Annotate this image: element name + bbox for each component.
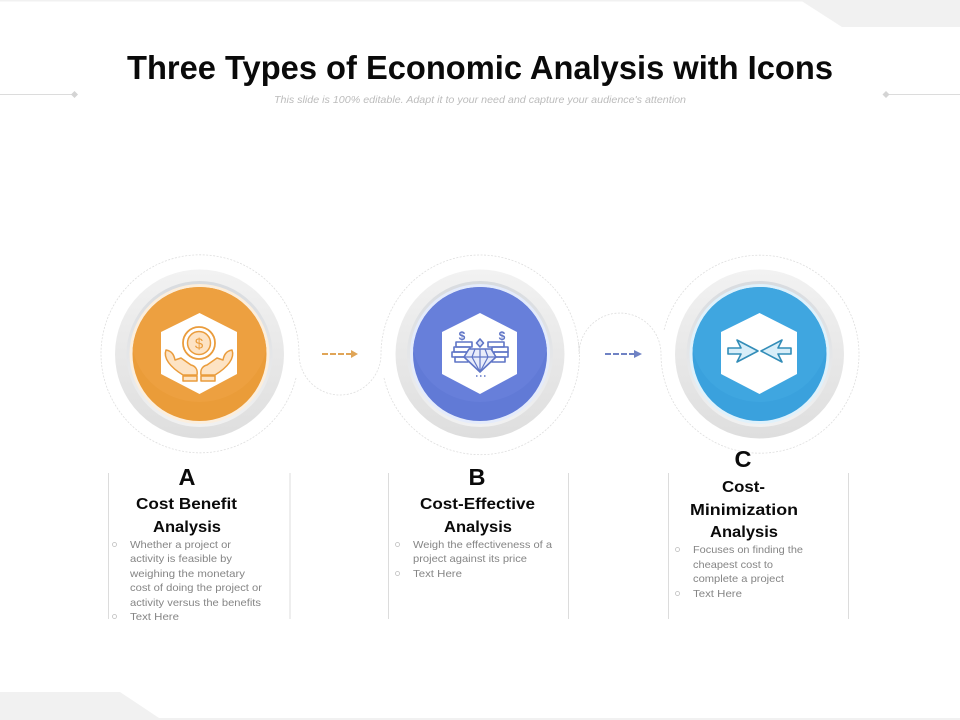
bullet list B: Weigh the effectiveness of a — [413, 540, 552, 551]
hexagon A — [161, 313, 237, 394]
icon: diamond with coins: $ — [459, 329, 466, 343]
heading A: Cost Benefit — [136, 496, 238, 513]
icon: hands holding coin — [165, 327, 233, 381]
column A text — [108, 464, 290, 623]
bullet list C: Focuses on finding the — [693, 545, 803, 556]
heading A — [136, 496, 238, 536]
circle badge C — [675, 270, 844, 438]
right title ornament — [882, 91, 960, 98]
icon: hands holding coin: $ — [195, 336, 204, 352]
letter B: B — [469, 464, 485, 490]
heading C — [690, 479, 798, 541]
icon: diamond with coins — [452, 329, 508, 376]
dashed connector outline — [101, 255, 859, 455]
title: Three Types of Economic Analysis with Icons — [127, 50, 833, 87]
icon: diamond with coins: $ — [499, 329, 506, 343]
heading B: Analysis — [444, 519, 512, 536]
bullet list C: cheapest cost to — [693, 560, 773, 571]
heading B — [420, 496, 535, 536]
bullet list A: Whether a project or — [130, 540, 232, 551]
column B text — [388, 464, 568, 619]
bullet list C: Text Here — [693, 589, 742, 600]
bullet list B — [396, 540, 552, 580]
heading B: Cost-Effective — [420, 496, 535, 513]
subtitle: This slide is 100% editable. Adapt it to your need and capture your audience's attention — [274, 94, 686, 106]
bullet list B: Text Here — [413, 569, 462, 580]
background decoration: top right corner shape — [0, 0, 960, 27]
circle badge B — [396, 270, 564, 438]
bullet list A: Text Here — [130, 612, 179, 623]
heading C: Cost- — [722, 479, 765, 496]
arrow: B to C — [605, 350, 642, 358]
bullet list C — [676, 545, 803, 600]
letter C: C — [735, 446, 752, 472]
bullet list A: cost of doing the project or — [130, 583, 263, 594]
hexagon C — [721, 313, 797, 394]
bullet list A: activity is feasible by — [130, 554, 233, 565]
letter A: A — [179, 464, 196, 490]
hexagon B — [442, 313, 517, 394]
bullet list A — [112, 540, 263, 623]
heading C: Analysis — [710, 524, 778, 541]
bullet list C: complete a project — [693, 574, 784, 585]
bullet list A: activity versus the benefits — [130, 598, 261, 609]
bullet list B: project against its price — [413, 554, 527, 565]
heading A: Analysis — [153, 519, 221, 536]
circle badge A — [115, 270, 284, 438]
background decoration: bottom left corner shape — [0, 692, 960, 720]
heading C: Minimization — [690, 502, 798, 519]
bullet list A: weighing the monetary — [129, 569, 246, 580]
column C text — [668, 446, 848, 619]
icon: converging arrows — [728, 340, 791, 362]
left title ornament — [0, 91, 78, 98]
arrow: A to B — [322, 350, 358, 358]
